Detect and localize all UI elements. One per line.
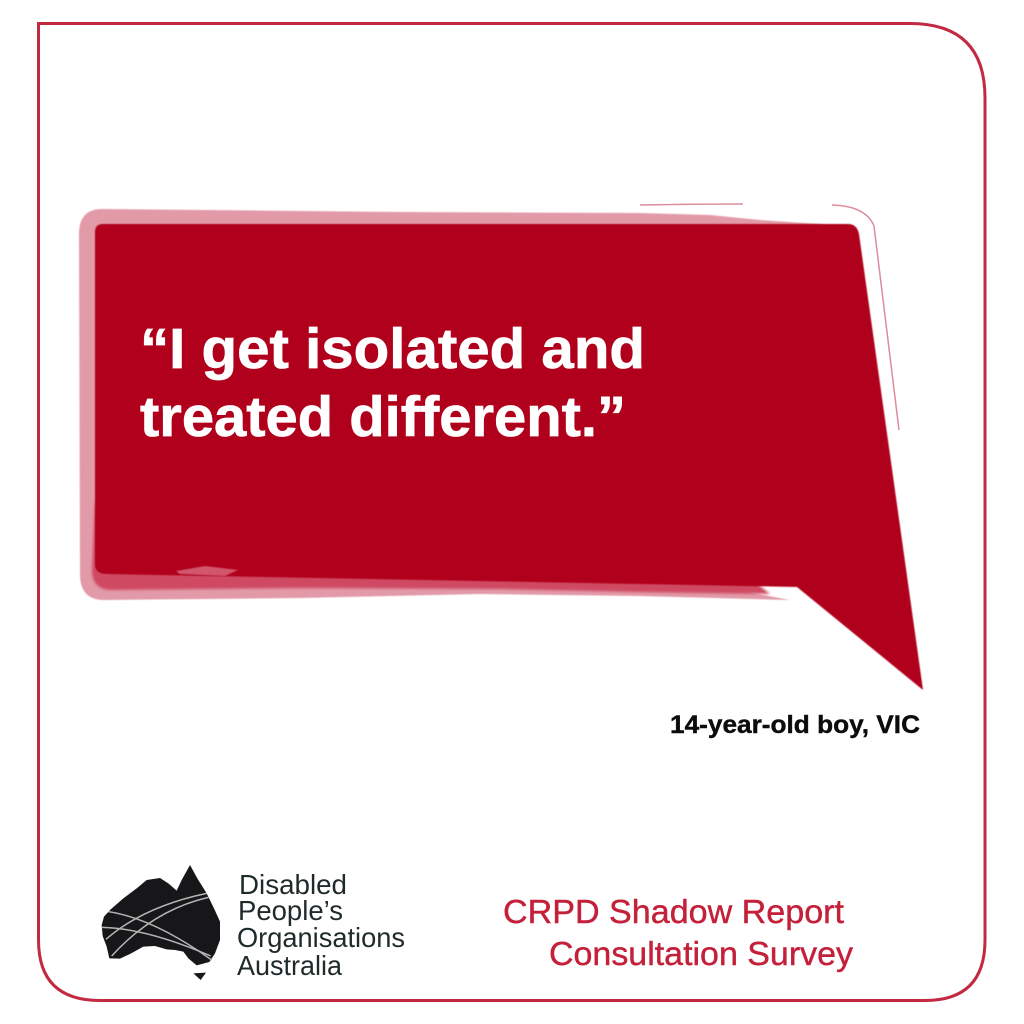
bubble thin brush strokes top right xyxy=(640,204,899,430)
survey title: Consultation Survey xyxy=(549,935,854,972)
panel: speech bubble xyxy=(79,204,923,690)
bubble brushed inner bottom band xyxy=(92,500,770,594)
bottom brush highlight xyxy=(176,566,238,576)
icon: Australia map xyxy=(102,865,220,980)
quote attribution: 14-year-old boy, VIC xyxy=(670,711,920,739)
organisation name: Disabled xyxy=(239,869,347,900)
organisation name: Organisations xyxy=(237,922,405,953)
quote text: “I get isolated and xyxy=(140,317,645,381)
logo: Disabled People's Organisations Australia xyxy=(102,865,413,981)
organisation name: Australia xyxy=(237,950,342,981)
organisation name: People’s xyxy=(238,895,343,926)
bubble main red shape xyxy=(95,224,923,690)
quote text: treated different.” xyxy=(140,385,626,449)
bubble brushed outer halo xyxy=(79,209,850,600)
survey title: CRPD Shadow Report xyxy=(503,893,844,930)
